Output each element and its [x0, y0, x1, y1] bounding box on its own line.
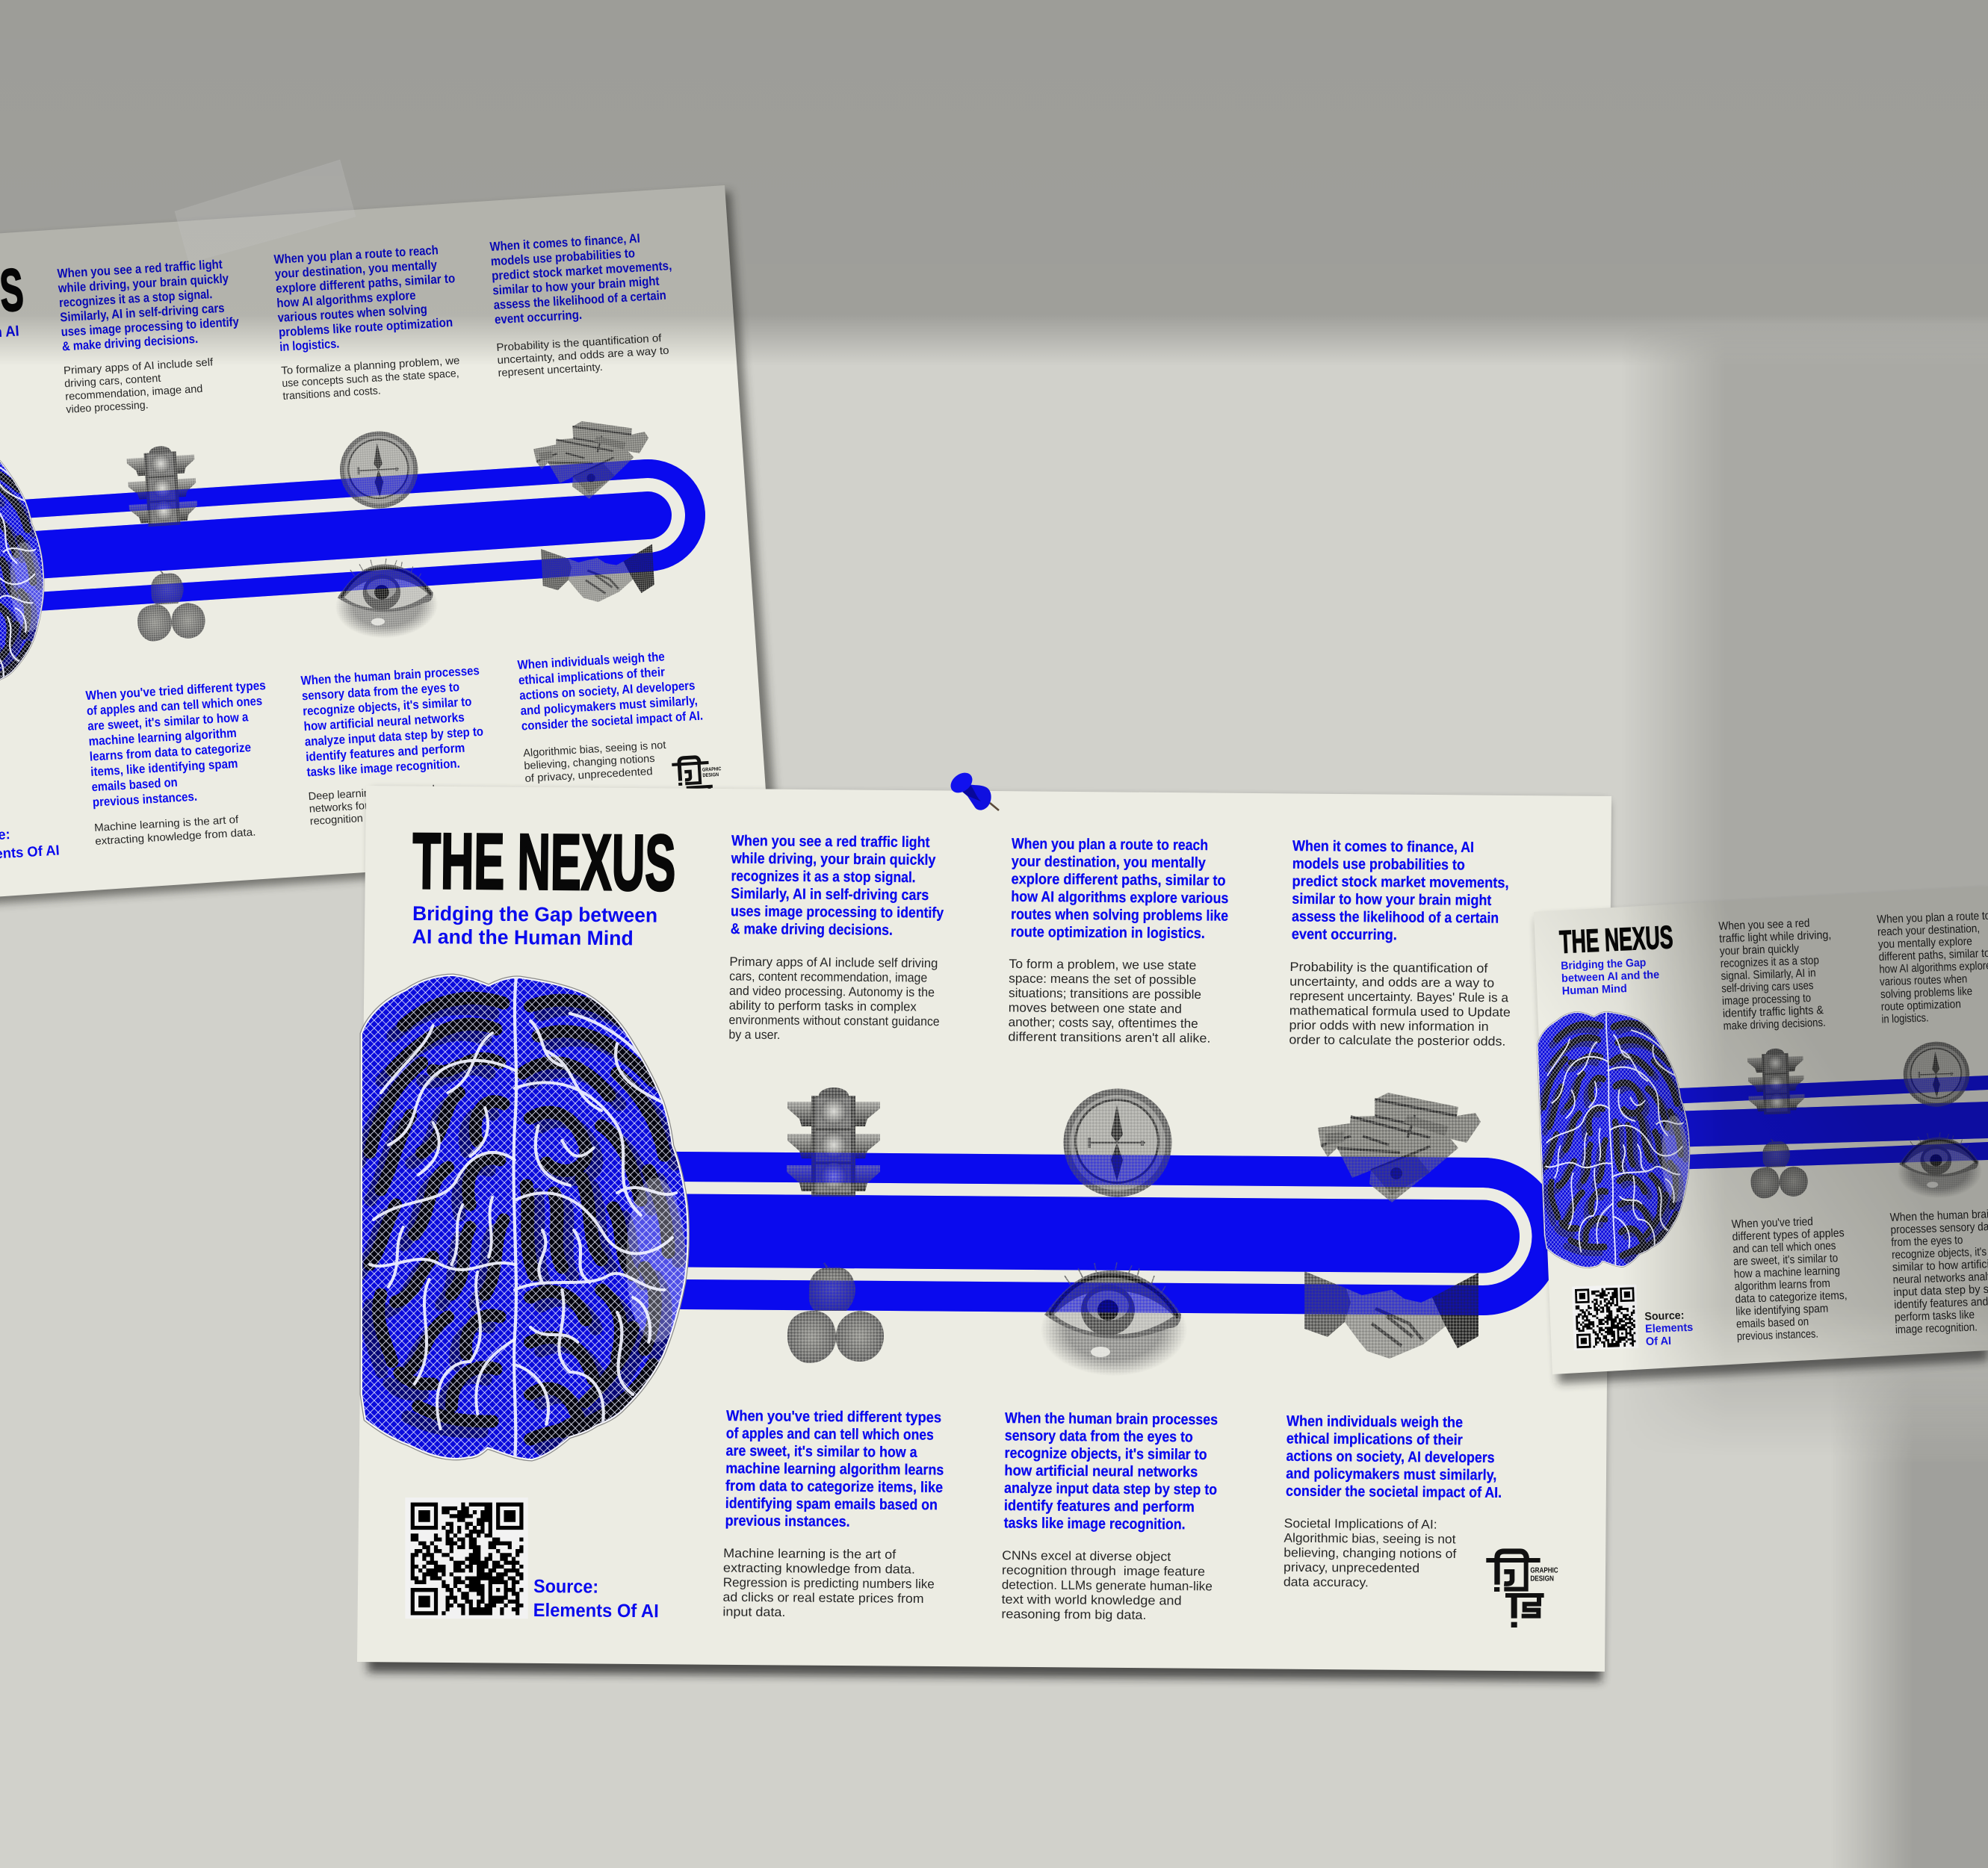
- panel: back poster: [0, 185, 770, 902]
- text: back poster ethics: ethical implications of their: [518, 665, 666, 687]
- text block: eye: [1001, 1410, 1218, 1623]
- text: right poster traffic light: your brain quickly: [1720, 943, 1800, 958]
- text block: ethics: privacy, unprecedented: [1283, 1560, 1419, 1575]
- text: right poster eye: perform tasks like: [1895, 1309, 1975, 1324]
- text: right poster traffic light: identify traffic lights &: [1722, 1004, 1824, 1020]
- QR code: [405, 1498, 528, 1619]
- text: back poster traffic light: driving cars, content: [64, 373, 161, 390]
- text: back poster ethics: of privacy, unprecedented: [524, 766, 653, 785]
- sheet shadow: right poster: [1538, 893, 1988, 1383]
- text: back poster eye: recognize objects, it's similar to: [303, 695, 472, 719]
- text: right poster route: you mentally explore: [1877, 935, 1972, 951]
- text block: apples: ad clicks or real estate prices from: [722, 1590, 924, 1606]
- text block: apples: [722, 1408, 944, 1621]
- text block: traffic light: cars, content recommendation, image: [729, 969, 927, 985]
- text block: ethics: consider the societal impact of AI.: [1286, 1483, 1502, 1501]
- icon: money: [532, 418, 652, 502]
- text block: traffic light: Similarly, AI in self-driving cars: [731, 886, 929, 904]
- text: back poster traffic light: while driving, your brain quickly: [57, 271, 229, 296]
- icon: eye: [333, 556, 439, 641]
- text: back poster route: transitions and costs.: [282, 385, 381, 403]
- text block: eye: recognize objects, it's similar to: [1004, 1445, 1207, 1463]
- icon: compass: [1064, 1089, 1171, 1197]
- text: back poster traffic light: uses image processing to identify: [61, 314, 240, 339]
- text block: finance: represent uncertainty. Bayes' Rule is a: [1289, 989, 1509, 1005]
- text block: apples: previous instances.: [725, 1512, 850, 1530]
- text block: ethics: data accuracy.: [1283, 1574, 1369, 1589]
- text block: finance: [1289, 838, 1512, 1049]
- text block: traffic light: uses image processing to identify: [731, 903, 944, 922]
- text: back poster ethics: consider the societal impact of AI.: [521, 709, 704, 733]
- text block: route: To form a problem, we use state: [1009, 957, 1197, 972]
- text: back poster traffic light: video processing.: [66, 400, 149, 416]
- ribbon: main: [668, 1152, 1562, 1316]
- text block: traffic light: by a user.: [728, 1027, 781, 1042]
- text block: finance: order to calculate the posterior odds.: [1289, 1032, 1506, 1049]
- text block: ethics: Societal Implications of AI:: [1284, 1516, 1437, 1532]
- shading: right poster: [1534, 887, 1988, 1374]
- text block: traffic light: while driving, your brain quickly: [731, 851, 936, 869]
- text block: route: your destination, you mentally: [1012, 854, 1207, 872]
- text: back poster ethics: When individuals weigh the: [517, 650, 665, 672]
- text: right poster route: in logistics.: [1881, 1011, 1929, 1026]
- text block: eye: analyze input data step by step to: [1004, 1480, 1217, 1498]
- text block: ethics: believing, changing notions of: [1283, 1545, 1457, 1561]
- text block: route: different transitions aren't all alike.: [1008, 1029, 1211, 1046]
- source credit: Elements Of AI: [533, 1600, 659, 1622]
- text: back poster apples: extracting knowledge from data.: [95, 827, 256, 848]
- icon: compass: [1902, 1040, 1971, 1108]
- text: back poster route: how AI algorithms explore: [276, 288, 416, 311]
- text: back poster eye: [300, 663, 489, 828]
- text block: apples: machine learning algorithm learns: [725, 1460, 944, 1479]
- text block: ethics: and policymakers must similarly,: [1286, 1465, 1496, 1483]
- text: back poster eye: Deep learning uses neural: [308, 783, 436, 803]
- text block: route: route optimization in logistics.: [1011, 924, 1205, 942]
- text block: apples: input data.: [722, 1604, 785, 1619]
- text: back poster finance: When it comes to finance, AI: [489, 231, 640, 254]
- text block: eye: tasks like image recognition.: [1004, 1515, 1186, 1533]
- text block: route: another; costs say, oftentimes the: [1009, 1015, 1198, 1031]
- text block: route: [1008, 836, 1229, 1046]
- text: back poster finance: assess the likelihood of a certain: [493, 288, 666, 312]
- text block: route: When you plan a route to reach: [1012, 836, 1208, 854]
- text: right poster apples: When you've tried: [1731, 1215, 1813, 1231]
- text block: ethics: When individuals weigh the: [1286, 1413, 1463, 1431]
- text block: apples: identifying spam emails based on: [725, 1495, 938, 1513]
- text block: ethics: actions on society, AI developers: [1286, 1448, 1495, 1466]
- text: right poster eye: from the eyes to: [1891, 1234, 1963, 1249]
- icon: eye: [1041, 1262, 1187, 1376]
- logo: back poster: [672, 756, 724, 810]
- paper: right poster: [1534, 887, 1988, 1374]
- text: back poster finance: event occurring.: [494, 308, 583, 327]
- logo: graphic design: [1486, 1551, 1558, 1627]
- ribbon tint over icons: [668, 1152, 1562, 1316]
- text block: traffic light: When you see a red traffic light: [731, 833, 930, 851]
- panel: main poster: [357, 786, 1611, 1672]
- text: right poster traffic light: When you see a red: [1718, 917, 1810, 933]
- text block: finance: prior odds with new information in: [1289, 1018, 1489, 1034]
- text block: apples: When you've tried different types: [726, 1408, 941, 1426]
- subtitle: right poster: Human Mind: [1561, 982, 1627, 998]
- subtitle: AI and the Human Mind: [412, 925, 634, 949]
- brain: right poster: [1535, 1008, 1694, 1270]
- text: back poster eye: how artificial neural networks: [303, 710, 465, 733]
- text: back poster apples: machine learning algorithm: [88, 726, 237, 748]
- subtitle: [412, 902, 657, 950]
- icon: apples: [787, 1263, 884, 1363]
- icon: traffic light: [126, 444, 199, 528]
- text block: route: moves between one state and: [1009, 1000, 1182, 1016]
- text: back poster route: When you plan a route to reach: [273, 243, 439, 267]
- ribbon: back poster: [0, 456, 709, 614]
- tape: [175, 160, 356, 263]
- text: right poster traffic light: self-driving cars uses: [1721, 979, 1814, 995]
- text: back poster apples: [85, 678, 276, 848]
- text: back poster apples: When you've tried different types: [85, 678, 266, 703]
- text block: finance: models use probabilities to: [1292, 856, 1465, 873]
- source: back poster: [0, 827, 60, 864]
- text: back poster route: use concepts such as the state space,: [282, 367, 459, 390]
- text: back poster route: your destination, you mentally: [274, 258, 438, 281]
- text: back poster traffic light: When you see a red traffic light: [57, 257, 223, 281]
- text: right poster eye: [1889, 1208, 1988, 1336]
- paper: main poster: [357, 786, 1611, 1672]
- text block: eye: recognition through image feature: [1002, 1563, 1205, 1579]
- text: right poster apples: previous instances.: [1736, 1327, 1818, 1343]
- text: right poster apples: data to categorize items,: [1735, 1289, 1848, 1306]
- text: right poster apples: algorithm learns from: [1734, 1277, 1830, 1294]
- text: back poster finance: similar to how your brain might: [492, 274, 660, 297]
- text: back poster eye: When the human brain processes: [300, 663, 480, 688]
- text: back poster route: [273, 242, 462, 403]
- icon: eye: [1896, 1131, 1984, 1200]
- subtitle: Bridging the Gap between: [412, 902, 657, 927]
- text: back poster apples: items, like identifying spam: [90, 757, 238, 779]
- text: right poster traffic light: make driving decisions.: [1723, 1017, 1826, 1033]
- title: right poster: THE NEXUS: [1558, 919, 1673, 961]
- text: back poster finance: uncertainty, and odds are a way to: [497, 345, 669, 367]
- text block: traffic light: and video processing. Autonomy is the: [729, 984, 935, 999]
- text block: finance: mathematical formula used to Update: [1289, 1003, 1511, 1020]
- text block: ethics: Algorithmic bias, seeing is not: [1283, 1531, 1456, 1546]
- text: back poster eye: identify features and perform: [306, 741, 465, 764]
- text: right poster route: solving problems like: [1880, 985, 1972, 1001]
- text: back poster ethics: Algorithmic bias, seeing is not: [523, 739, 666, 760]
- sheet shadow: main poster: [368, 792, 1608, 1681]
- text block: apples: of apples and can tell which ones: [726, 1425, 934, 1444]
- text block: traffic light: [728, 833, 945, 1043]
- text: right poster route: route optimization: [1880, 998, 1961, 1014]
- text: back poster finance: models use probabilities to: [490, 246, 636, 269]
- icon: apples: [135, 568, 206, 642]
- text: right poster apples: like identifying spam: [1735, 1303, 1829, 1318]
- text block: finance: event occurring.: [1292, 926, 1397, 943]
- text: back poster apples: previous instances.: [92, 789, 198, 810]
- text: back poster eye: networks for image: [309, 798, 401, 816]
- text: right poster apples: [1731, 1214, 1849, 1343]
- icon: compass: [338, 429, 420, 510]
- text block: traffic light: environments without constant guidance: [729, 1013, 940, 1028]
- text block: eye: When the human brain processes: [1005, 1410, 1218, 1428]
- text: back poster eye: sensory data from the eyes to: [301, 680, 460, 703]
- text: back poster route: To formalize a planning problem, we: [281, 355, 460, 377]
- text block: finance: predict stock market movements,: [1292, 873, 1509, 892]
- text: right poster apples: are sweet, it's similar to: [1733, 1252, 1839, 1268]
- text block: route: situations; transitions are possible: [1009, 986, 1201, 1002]
- text block: finance: uncertainty, and odds are a way to: [1289, 974, 1494, 990]
- text: back poster traffic light: Primary apps of AI include self: [64, 356, 214, 377]
- text block: eye: identify features and perform: [1004, 1498, 1195, 1515]
- text block: apples: Regression is predicting numbers like: [723, 1575, 935, 1591]
- heading: back poster title fragment: [0, 256, 25, 350]
- text block: apples: from data to categorize items, like: [725, 1478, 943, 1496]
- icon: handshake: [541, 543, 655, 605]
- text block: ethics: [1283, 1413, 1502, 1591]
- text block: eye: CNNs excel at diverse object: [1002, 1548, 1171, 1564]
- text: right poster apples: different types of apples: [1732, 1226, 1845, 1244]
- text block: finance: When it comes to finance, AI: [1292, 838, 1474, 856]
- text: right poster apples: and can tell which ones: [1732, 1240, 1836, 1256]
- subtitle: right poster: Bridging the Gap: [1561, 956, 1647, 972]
- text: back poster apples: Machine learning is the art of: [94, 814, 240, 834]
- text block: finance: Probability is the quantification of: [1289, 960, 1488, 975]
- text block: route: routes when solving problems like: [1011, 906, 1228, 925]
- brain: back poster: [0, 431, 52, 707]
- text: back poster ethics: [517, 648, 707, 785]
- text block: eye: sensory data from the eyes to: [1005, 1427, 1193, 1445]
- text: right poster traffic light: image processing to: [1722, 992, 1811, 1008]
- text: back poster route: various routes when solving: [277, 302, 427, 325]
- text: back poster traffic light: recommendation, image and: [65, 383, 203, 403]
- icon: money: [1318, 1093, 1481, 1203]
- icon: push pin: [947, 769, 999, 810]
- source: right poster: Of AI: [1646, 1335, 1671, 1348]
- icon: apples: [1750, 1138, 1808, 1199]
- text: right poster traffic light: signal. Similarly, AI in: [1721, 966, 1816, 983]
- text: back poster finance: Probability is the quantification of: [496, 332, 663, 354]
- source: right poster: [1644, 1309, 1694, 1348]
- text: back poster traffic light: recognizes it as a stop signal.: [59, 287, 213, 310]
- title: THE NEXUS: [412, 817, 676, 907]
- text: back poster eye: tasks like image recognition.: [306, 757, 460, 779]
- ribbon: right poster: [1670, 1076, 1988, 1170]
- text block: ethics: ethical implications of their: [1286, 1430, 1463, 1448]
- text block: eye: reasoning from big data.: [1001, 1607, 1146, 1622]
- text: right poster eye: image recognition.: [1895, 1321, 1978, 1336]
- text block: apples: extracting knowledge from data.: [723, 1561, 915, 1577]
- text: back poster eye: analyze input data step by step to: [304, 724, 484, 749]
- text: right poster traffic light: [1718, 916, 1836, 1033]
- text: back poster apples: of apples and can tell which ones: [86, 694, 263, 718]
- text block: route: how AI algorithms explore various: [1011, 889, 1228, 907]
- text: back poster route: explore different paths, similar to: [276, 271, 456, 296]
- paper: back poster: [0, 185, 770, 902]
- icon: traffic light: [787, 1087, 880, 1197]
- icon: handshake: [1304, 1271, 1478, 1359]
- icon: traffic light: [1747, 1048, 1805, 1115]
- sheet shadow: back poster: [0, 191, 778, 908]
- ribbon tint over icons: [1670, 1076, 1988, 1170]
- text block: route: space: means the set of possible: [1009, 971, 1196, 987]
- text block: eye: how artificial neural networks: [1004, 1462, 1198, 1480]
- source: right poster: Source:: [1644, 1309, 1685, 1324]
- text: back poster traffic light: [56, 256, 244, 416]
- text block: traffic light: Primary apps of AI include self driving: [729, 955, 938, 970]
- text: back poster apples: emails based on: [91, 775, 178, 794]
- text block: traffic light: & make driving decisions.: [731, 921, 893, 939]
- text block: apples: are sweet, it's similar to how a: [725, 1443, 917, 1461]
- QR code: right poster: [1572, 1285, 1638, 1350]
- text: back poster eye: recognition and more.: [309, 810, 415, 828]
- text: back poster finance: [489, 229, 678, 379]
- source credit: [533, 1576, 659, 1622]
- text block: finance: assess the likelihood of a certain: [1292, 908, 1499, 927]
- text: right poster traffic light: recognizes it as a stop: [1720, 954, 1819, 970]
- text block: eye: text with world knowledge and: [1001, 1592, 1182, 1608]
- source credit: Source:: [533, 1576, 598, 1598]
- text block: eye: detection. LLMs generate human-like: [1002, 1577, 1213, 1593]
- text: right poster apples: emails based on: [1736, 1315, 1809, 1331]
- text: back poster finance: predict stock market movements,: [492, 258, 672, 283]
- text: right poster route: various routes when: [1880, 972, 1968, 989]
- text: back poster ethics: actions on society, AI developers: [519, 678, 696, 703]
- subtitle: right poster: between AI and the: [1561, 969, 1659, 985]
- ribbon tint over icons: [0, 456, 709, 614]
- text block: traffic light: ability to perform tasks in complex: [729, 998, 917, 1014]
- text: right poster route: [1877, 910, 1988, 1026]
- text: back poster apples: learns from data to categorize: [89, 740, 252, 764]
- brain illustration: [359, 976, 690, 1462]
- text: back poster traffic light: & make driving decisions.: [61, 332, 199, 354]
- text block: traffic light: recognizes it as a stop signal.: [731, 868, 916, 886]
- text block: finance: similar to how your brain might: [1292, 891, 1492, 909]
- text: right poster traffic light: traffic light while driving,: [1719, 928, 1832, 946]
- text: right poster apples: how a machine learning: [1734, 1265, 1840, 1281]
- text block: apples: Machine learning is the art of: [723, 1546, 897, 1562]
- text: back poster route: problems like route optimization: [278, 315, 453, 339]
- panel: right poster: [1534, 887, 1988, 1374]
- text: back poster ethics: and policymakers must similarly,: [520, 693, 698, 718]
- subtitle: right poster: [1561, 956, 1660, 998]
- text: back poster apples: are sweet, it's similar to how a: [87, 710, 249, 733]
- text: back poster finance: represent uncertainty.: [498, 362, 603, 379]
- text: back poster route: in logistics.: [279, 336, 340, 354]
- text block: route: explore different paths, similar to: [1011, 871, 1226, 889]
- source: right poster: Elements: [1645, 1321, 1694, 1335]
- text: back poster traffic light: Similarly, AI in self-driving cars: [60, 301, 225, 324]
- text: back poster ethics: believing, changing notions: [524, 753, 655, 772]
